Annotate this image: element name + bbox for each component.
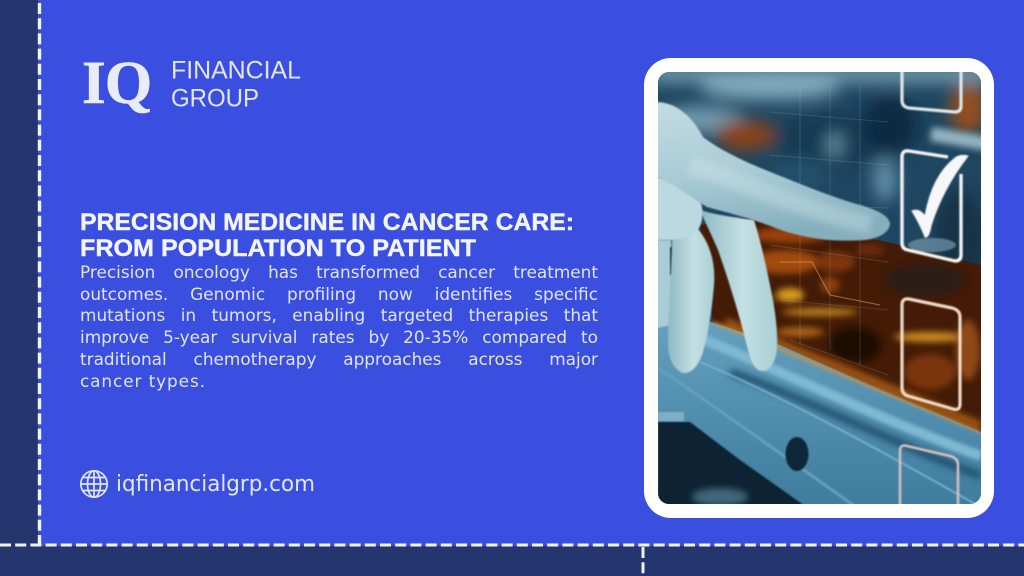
blue machine rail [658, 319, 981, 504]
blurred laboratory background [650, 65, 991, 504]
website row [80, 470, 315, 498]
logo mark: IQ: IQ [82, 50, 151, 117]
bottom checkbox [900, 446, 958, 506]
logo wordmark: GROUP [171, 84, 259, 112]
dark machinery corner [658, 422, 805, 506]
body text: outcomes. Genomic profiling now identifies specific [80, 284, 598, 304]
index finger [656, 102, 890, 241]
checked checkbox [902, 151, 968, 261]
title: FROM POPULATION TO PATIENT [80, 235, 476, 262]
icon: globe [80, 470, 108, 498]
white photo frame [644, 58, 994, 518]
knuckle [656, 177, 703, 240]
knob [786, 437, 808, 471]
checklist boxes [900, 70, 968, 506]
orange glass region [700, 215, 981, 432]
body text [80, 262, 598, 391]
title: PRECISION MEDICINE IN CANCER CARE: [80, 209, 574, 236]
body text: traditional chemotherapy approaches across major [80, 349, 598, 369]
fourth finger strip [658, 240, 672, 328]
body text: improve 5-year survival rates by 20-35% compared to [80, 327, 598, 347]
body text: cancer types. [80, 371, 206, 391]
faint interface grid [770, 85, 888, 375]
top checkbox [902, 70, 961, 112]
website url: iqfinancialgrp.com [116, 472, 315, 497]
body text: Precision oncology has transformed cancer treatment [80, 262, 598, 282]
ring finger [668, 228, 714, 373]
lower checkbox [902, 299, 960, 409]
logo wordmark: FINANCIAL [171, 56, 301, 84]
logo wordmark [171, 56, 301, 112]
middle finger [700, 210, 777, 371]
title [80, 209, 574, 262]
photo panel: gloved hand and digital checklist [644, 58, 994, 518]
gloved fingers [656, 102, 890, 373]
body text: mutations in tumors, enabling targeted therapies that [80, 305, 598, 325]
icon: check mark [912, 155, 968, 237]
logo [82, 50, 301, 117]
